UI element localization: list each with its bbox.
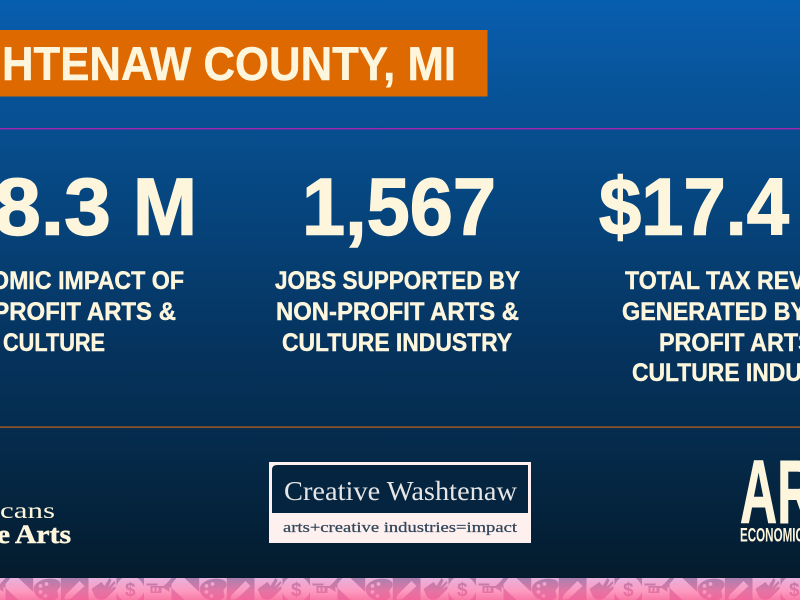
logo: Americans for the Arts: Arts [15,520,71,549]
logo: Americans for the Arts [0,498,71,549]
stat: jobs: JOBS SUPPORTED BY [275,267,520,295]
stat: tax revenue: $17.4 [599,162,789,252]
logo: Creative Washtenaw: arts+creative industries=impact [283,520,518,536]
stat: jobs: CULTURE INDUSTRY [282,329,512,357]
logo: Creative Washtenaw: Creative Washtenaw [284,476,518,506]
stat: economic impact: M [133,162,197,252]
icon strip [0,578,800,600]
stat: economic impact [0,162,197,357]
stat: jobs [275,162,520,357]
title banner: HTENAW COUNTY, MI [2,37,456,90]
stat: jobs: 1,567 [302,162,496,252]
logo: Creative Washtenaw [269,462,531,543]
stat: tax revenue [599,162,800,387]
stat: jobs: NON-PROFIT ARTS & [276,298,519,326]
logo: Americans for the Arts: cans [0,498,55,523]
stat: economic impact: CULTURE [3,329,105,357]
